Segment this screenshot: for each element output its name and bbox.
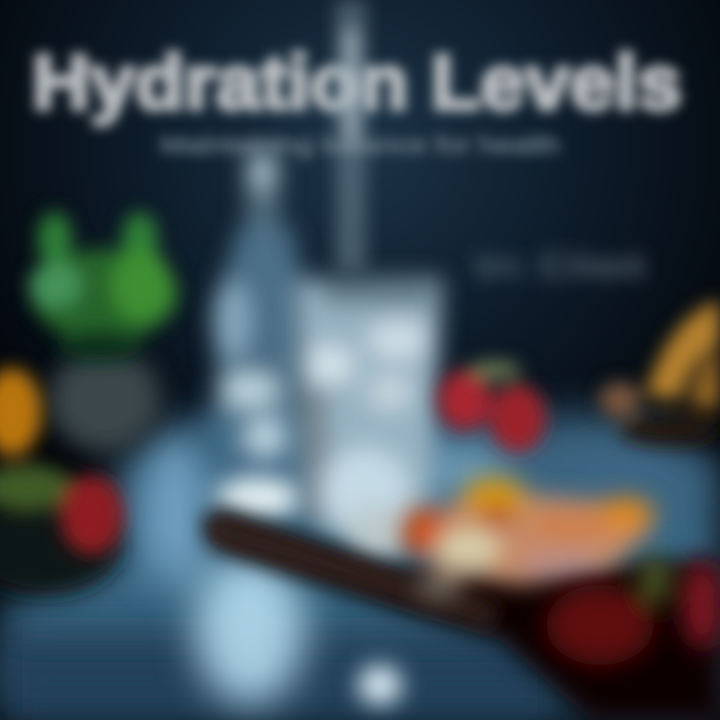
table surface	[0, 415, 720, 720]
strawberries	[439, 361, 546, 452]
icon: water glass	[295, 278, 442, 565]
board edge	[205, 514, 500, 628]
water stream	[336, 0, 366, 270]
bread on right	[600, 300, 720, 445]
table highlights	[143, 435, 710, 705]
plant pot	[49, 348, 161, 452]
left fruit bowl	[0, 368, 124, 596]
herb leaves	[29, 212, 179, 361]
glare spot on table	[358, 665, 402, 705]
salmon and vegetable plate	[403, 478, 655, 599]
glare beside glass	[216, 476, 300, 520]
subtitle: Maintaining balance for health	[160, 132, 560, 159]
icon: water bottle	[206, 150, 305, 460]
side caption: in Diet	[475, 248, 645, 284]
wooden board and dark foreground	[205, 512, 720, 720]
bowl shadow	[0, 500, 123, 596]
tomatoes at front right	[546, 556, 720, 665]
table base	[0, 640, 560, 720]
plant: green herb in pot	[29, 212, 179, 452]
title: Hydration Levels: Hydration Levels	[32, 38, 682, 126]
fruits	[0, 368, 124, 555]
